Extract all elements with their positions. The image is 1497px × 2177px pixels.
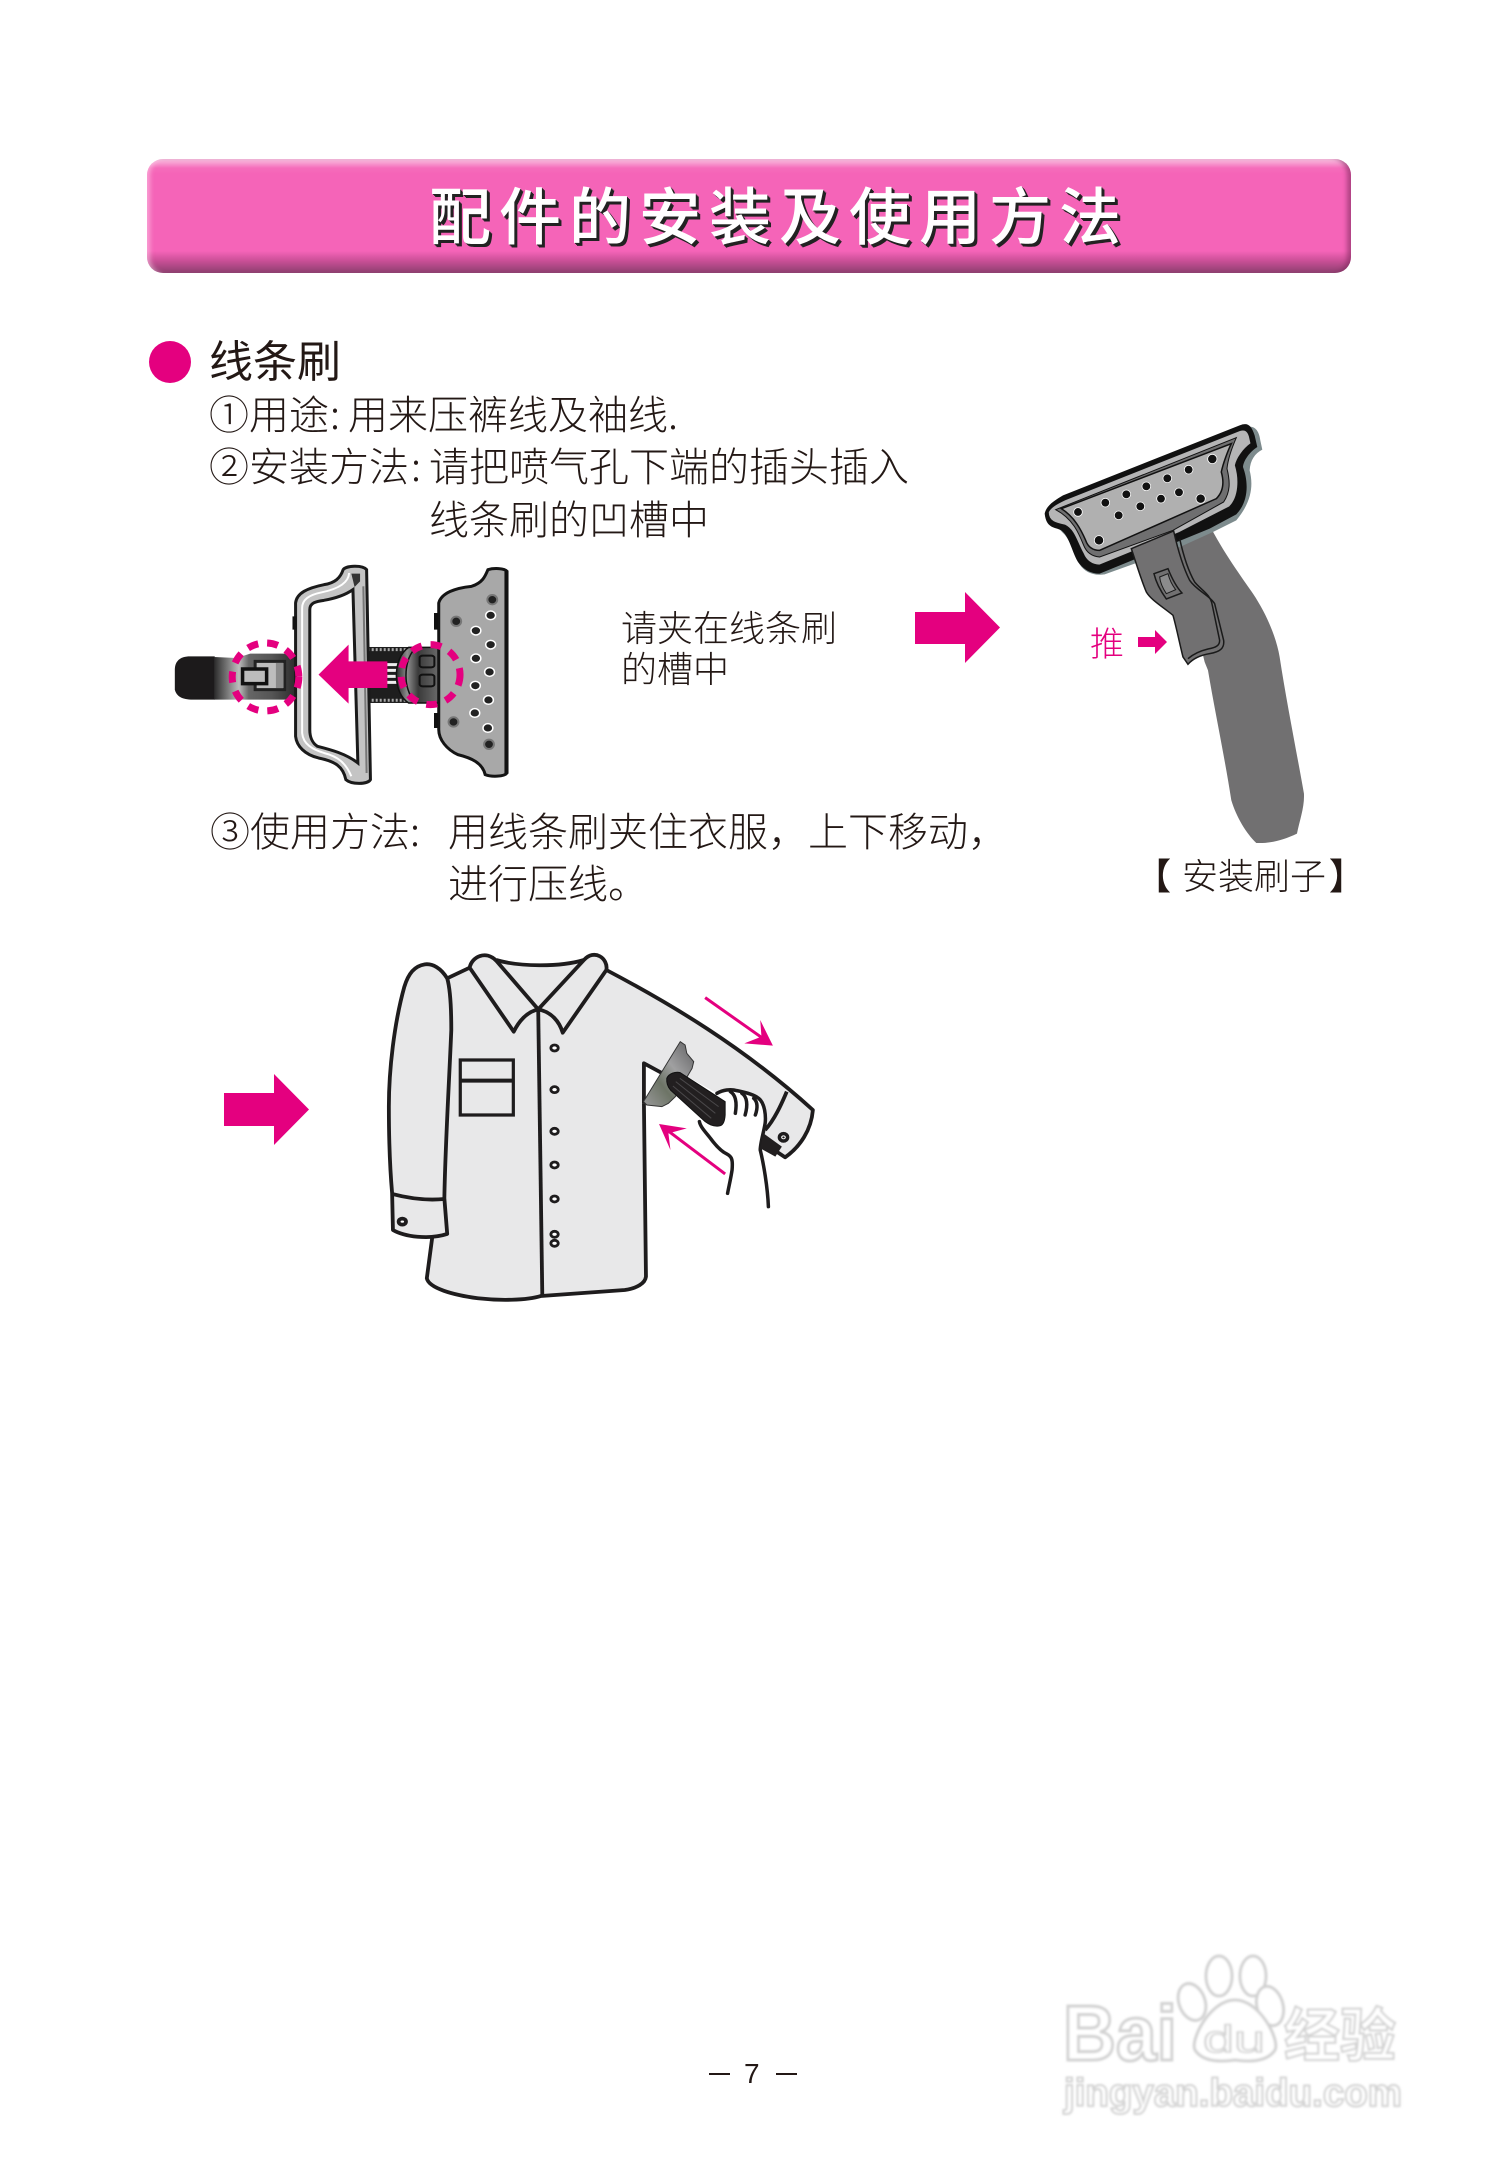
clip assembly illustration <box>174 564 509 785</box>
usage line: : <box>330 383 340 441</box>
pocket <box>460 1060 513 1115</box>
next-step arrow lower <box>224 1074 309 1145</box>
watermark: baidu jingyan <box>1062 1954 1402 2116</box>
collar <box>469 955 606 1033</box>
brush on sleeve <box>643 1042 725 1126</box>
brush caption: 安装刷子 <box>1182 848 1326 900</box>
clip note: 的槽中 <box>621 641 729 693</box>
installation text: : <box>411 435 421 493</box>
watermark: baidu jingyan: 经验 <box>1284 1989 1396 2073</box>
brush caption <box>1135 848 1365 900</box>
pink insertion arrow <box>318 645 387 704</box>
installation text: ②安装方法 <box>209 435 409 493</box>
section bullet <box>149 341 191 383</box>
watermark: baidu jingyan: Bai <box>1063 1989 1177 2077</box>
usage method text: 进行压线。 <box>448 852 648 910</box>
usage line: 用来压裤线及袖线. <box>348 383 678 441</box>
clip note: 请夹在线条刷 <box>621 600 837 652</box>
push arrow <box>1138 630 1167 654</box>
watermark: baidu jingyan: jingyan.baidu.com <box>1063 2072 1402 2115</box>
pink dashed highlights <box>232 643 460 711</box>
text: 【 <box>1135 848 1171 900</box>
shirt buttons <box>550 1045 558 1246</box>
motion arrow up <box>659 1124 725 1174</box>
cuff clip and button <box>760 1133 787 1157</box>
usage line: ①用途 <box>209 383 329 441</box>
grip barrel <box>367 647 440 703</box>
nozzle head <box>1045 424 1263 574</box>
section heading: 线条刷 <box>209 326 341 390</box>
push label: 推 <box>1090 617 1124 666</box>
brush assembled illustration <box>1044 424 1304 843</box>
next-step arrow top <box>915 592 1000 663</box>
title banner <box>147 159 1351 273</box>
title text: 配件的安装及使用方法 <box>429 167 1129 257</box>
shirt body <box>426 960 812 1300</box>
brush handle <box>175 654 297 700</box>
shirt illustration <box>386 952 815 1302</box>
left sleeve <box>388 964 451 1237</box>
usage method text: 用线条刷夹住衣服，上下移动， <box>448 800 1008 858</box>
page number: 7 <box>744 2058 760 2089</box>
installation text: 线条刷的凹槽中 <box>429 488 709 546</box>
installation text: 请把喷气孔下端的插头插入 <box>429 435 909 493</box>
motion arrow down <box>705 998 772 1046</box>
hand <box>699 1089 768 1207</box>
clasp <box>1132 531 1224 664</box>
clip note <box>621 600 837 693</box>
installation text <box>209 435 909 546</box>
usage method text: ③使用方法: <box>210 800 420 858</box>
guard frame <box>295 567 370 784</box>
watermark: baidu jingyan: du <box>1203 2019 1265 2061</box>
text: 】 <box>1329 848 1365 900</box>
usage method text <box>210 800 1008 910</box>
handle <box>1177 528 1304 843</box>
perforated plate <box>294 569 507 777</box>
